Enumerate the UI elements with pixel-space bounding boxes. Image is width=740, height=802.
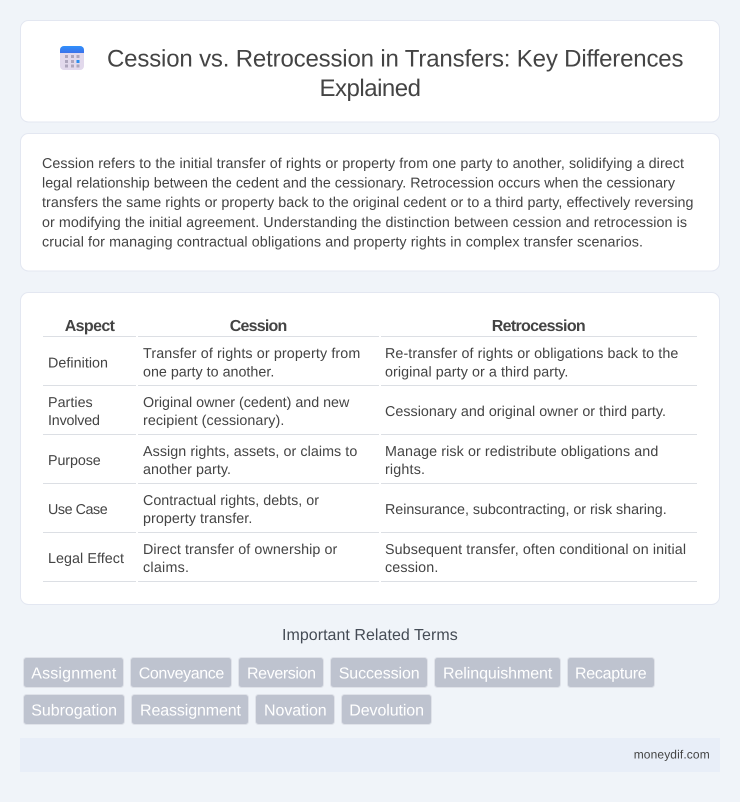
text block: introduction: crucial for managing contractual obligations and property rights in complex transfer scenarios.	[42, 234, 643, 250]
related term tags: Relinquishment	[443, 665, 553, 682]
related term tags: Devolution	[349, 702, 424, 719]
table header: Cession	[230, 318, 287, 335]
text block: introduction: transfers the same rights or property back to the original cedent or to a third party, effectively reversing	[42, 195, 694, 211]
table row: purpose	[43, 444, 697, 484]
table row: use case: Use Case	[48, 502, 108, 518]
panel: comparison table	[20, 292, 720, 604]
heading: important related terms: Important Related Terms	[282, 627, 458, 644]
table row: parties involved: Cessionary and original owner or third party.	[385, 404, 666, 420]
footer source text: moneydif.com	[634, 748, 710, 762]
panel: title card	[20, 20, 720, 122]
table row: use case: Contractual rights, debts, or	[143, 493, 319, 509]
table row: parties involved: Original owner (cedent) and new	[143, 395, 350, 411]
text block: introduction: Cession refers to the initial transfer of rights or property from one party to another, solidifying a direct	[42, 156, 684, 172]
table row: legal effect: cession.	[385, 560, 438, 576]
title: Cession vs. Retrocession in Transfers: Key Differences	[107, 46, 684, 72]
table row: legal effect: claims.	[143, 560, 189, 576]
table header	[43, 318, 697, 337]
icon: calendar	[60, 46, 84, 70]
table row: legal effect: Subsequent transfer, often conditional on initial	[385, 542, 686, 558]
footer bar	[20, 738, 720, 772]
panel: introduction card	[20, 134, 720, 271]
table row: parties involved	[43, 395, 697, 435]
table row: purpose: Assign rights, assets, or claims to	[143, 444, 357, 460]
table row: definition: Re-transfer of rights or obligations back to the	[385, 346, 678, 362]
related term tags: Recapture	[575, 665, 647, 682]
table row: definition: Transfer of rights or property from	[143, 346, 360, 362]
related term tags	[24, 658, 654, 724]
table header: Retrocession	[492, 318, 586, 335]
table row: use case	[43, 493, 697, 533]
table row: use case: property transfer.	[143, 511, 252, 527]
table row: parties involved: recipient (cessionary).	[143, 413, 284, 429]
table row: purpose: Purpose	[48, 453, 101, 469]
table row: purpose: Manage risk or redistribute obligations and	[385, 444, 658, 460]
related term tags: Subrogation	[31, 702, 117, 719]
table header: Aspect	[65, 318, 116, 335]
table row: parties involved: Involved	[48, 413, 100, 429]
related term tags: Assignment	[31, 665, 117, 682]
related term tags: Succession	[339, 665, 420, 682]
table row: parties involved: Parties	[48, 395, 93, 411]
table row: legal effect: Legal Effect	[48, 551, 124, 567]
related term tags: Reassignment	[140, 702, 242, 719]
table row: definition	[43, 346, 697, 386]
related term tags: Conveyance	[139, 665, 224, 682]
table row: use case: Reinsurance, subcontracting, or risk sharing.	[385, 502, 667, 518]
table row: legal effect	[43, 542, 697, 582]
table row: definition: original party or a third party.	[385, 365, 568, 381]
table row: purpose: another party.	[143, 462, 231, 478]
table row: legal effect: Direct transfer of ownership or	[143, 542, 338, 558]
table row: purpose: rights.	[385, 462, 425, 478]
text block: introduction: or modifying the initial agreement. Understanding the distinction between cession and retrocession is	[42, 215, 687, 231]
related term tags: Novation	[264, 702, 327, 719]
text block: introduction	[42, 156, 694, 250]
text block: introduction: legal relationship between the cedent and the cessionary. Retrocession occurs when the cessionary	[42, 176, 676, 192]
related term tags: Reversion	[247, 665, 316, 682]
table row: definition: Definition	[48, 355, 108, 371]
table row: definition: one party to another.	[143, 365, 274, 381]
title: Explained	[320, 75, 421, 102]
title	[107, 46, 684, 102]
